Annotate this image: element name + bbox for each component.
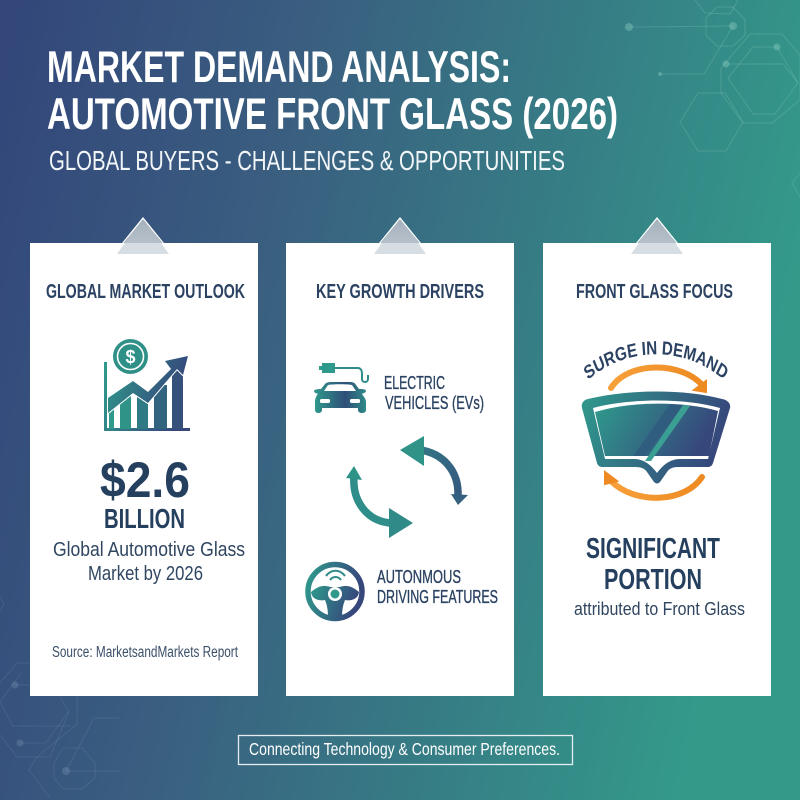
icon: windshield with arrows bbox=[582, 367, 730, 498]
pointer tab bbox=[631, 218, 683, 254]
heading: GLOBAL MARKET OUTLOOK bbox=[46, 281, 245, 303]
heading: FRONT GLASS FOCUS bbox=[576, 281, 733, 303]
arrow: clockwise bottom bbox=[346, 466, 413, 538]
label: electric vehicles: ELECTRIC bbox=[384, 372, 445, 393]
footer tagline: Connecting Technology & Consumer Preferences. bbox=[249, 739, 560, 759]
decorative network top right bbox=[625, 0, 800, 197]
title: MARKET DEMAND ANALYSIS: bbox=[47, 43, 511, 92]
card background bbox=[30, 243, 258, 696]
label: electric vehicles bbox=[384, 372, 484, 413]
footer tagline bbox=[238, 736, 572, 764]
value label bbox=[586, 533, 720, 596]
icon: rising chart with dollar coin: $ bbox=[125, 347, 136, 367]
pointer tab bbox=[374, 218, 426, 254]
source: Source: MarketsandMarkets Report bbox=[52, 644, 239, 661]
label: autonomous driving: DRIVING FEATURES bbox=[377, 586, 498, 607]
description: attributed to Front Glass bbox=[574, 598, 745, 619]
value label: SIGNIFICANT bbox=[586, 533, 720, 565]
description bbox=[53, 539, 245, 585]
label: autonomous driving bbox=[377, 566, 498, 607]
card background bbox=[286, 243, 514, 696]
icon: electric car bbox=[314, 363, 368, 413]
value: $2.6 bbox=[100, 452, 190, 508]
pointer tab bbox=[117, 218, 169, 254]
label: electric vehicles: VEHICLES (EVs) bbox=[385, 392, 484, 413]
card background bbox=[543, 243, 771, 696]
label: autonomous driving: AUTONMOUS bbox=[377, 566, 461, 587]
panel: global market outlook bbox=[30, 218, 258, 696]
curved label: surge in demand: SURGE IN DEMAND bbox=[584, 341, 728, 378]
decorative network bottom left bbox=[0, 597, 120, 798]
title bbox=[47, 43, 618, 139]
icon: steering wheel bbox=[308, 564, 362, 618]
arrow: clockwise top bbox=[400, 436, 468, 505]
heading: KEY GROWTH DRIVERS bbox=[316, 281, 484, 303]
description: Market by 2026 bbox=[88, 563, 203, 585]
value label: PORTION bbox=[604, 564, 702, 596]
panel: key growth drivers bbox=[286, 218, 514, 696]
title: AUTOMOTIVE FRONT GLASS (2026) bbox=[47, 90, 618, 139]
panel: front glass focus bbox=[543, 217, 771, 696]
icon: rising chart with dollar coin bbox=[104, 339, 190, 431]
description: Global Automotive Glass bbox=[53, 539, 245, 561]
unit: BILLION bbox=[104, 503, 185, 534]
subtitle: GLOBAL BUYERS - CHALLENGES & OPPORTUNITIES bbox=[49, 145, 565, 176]
